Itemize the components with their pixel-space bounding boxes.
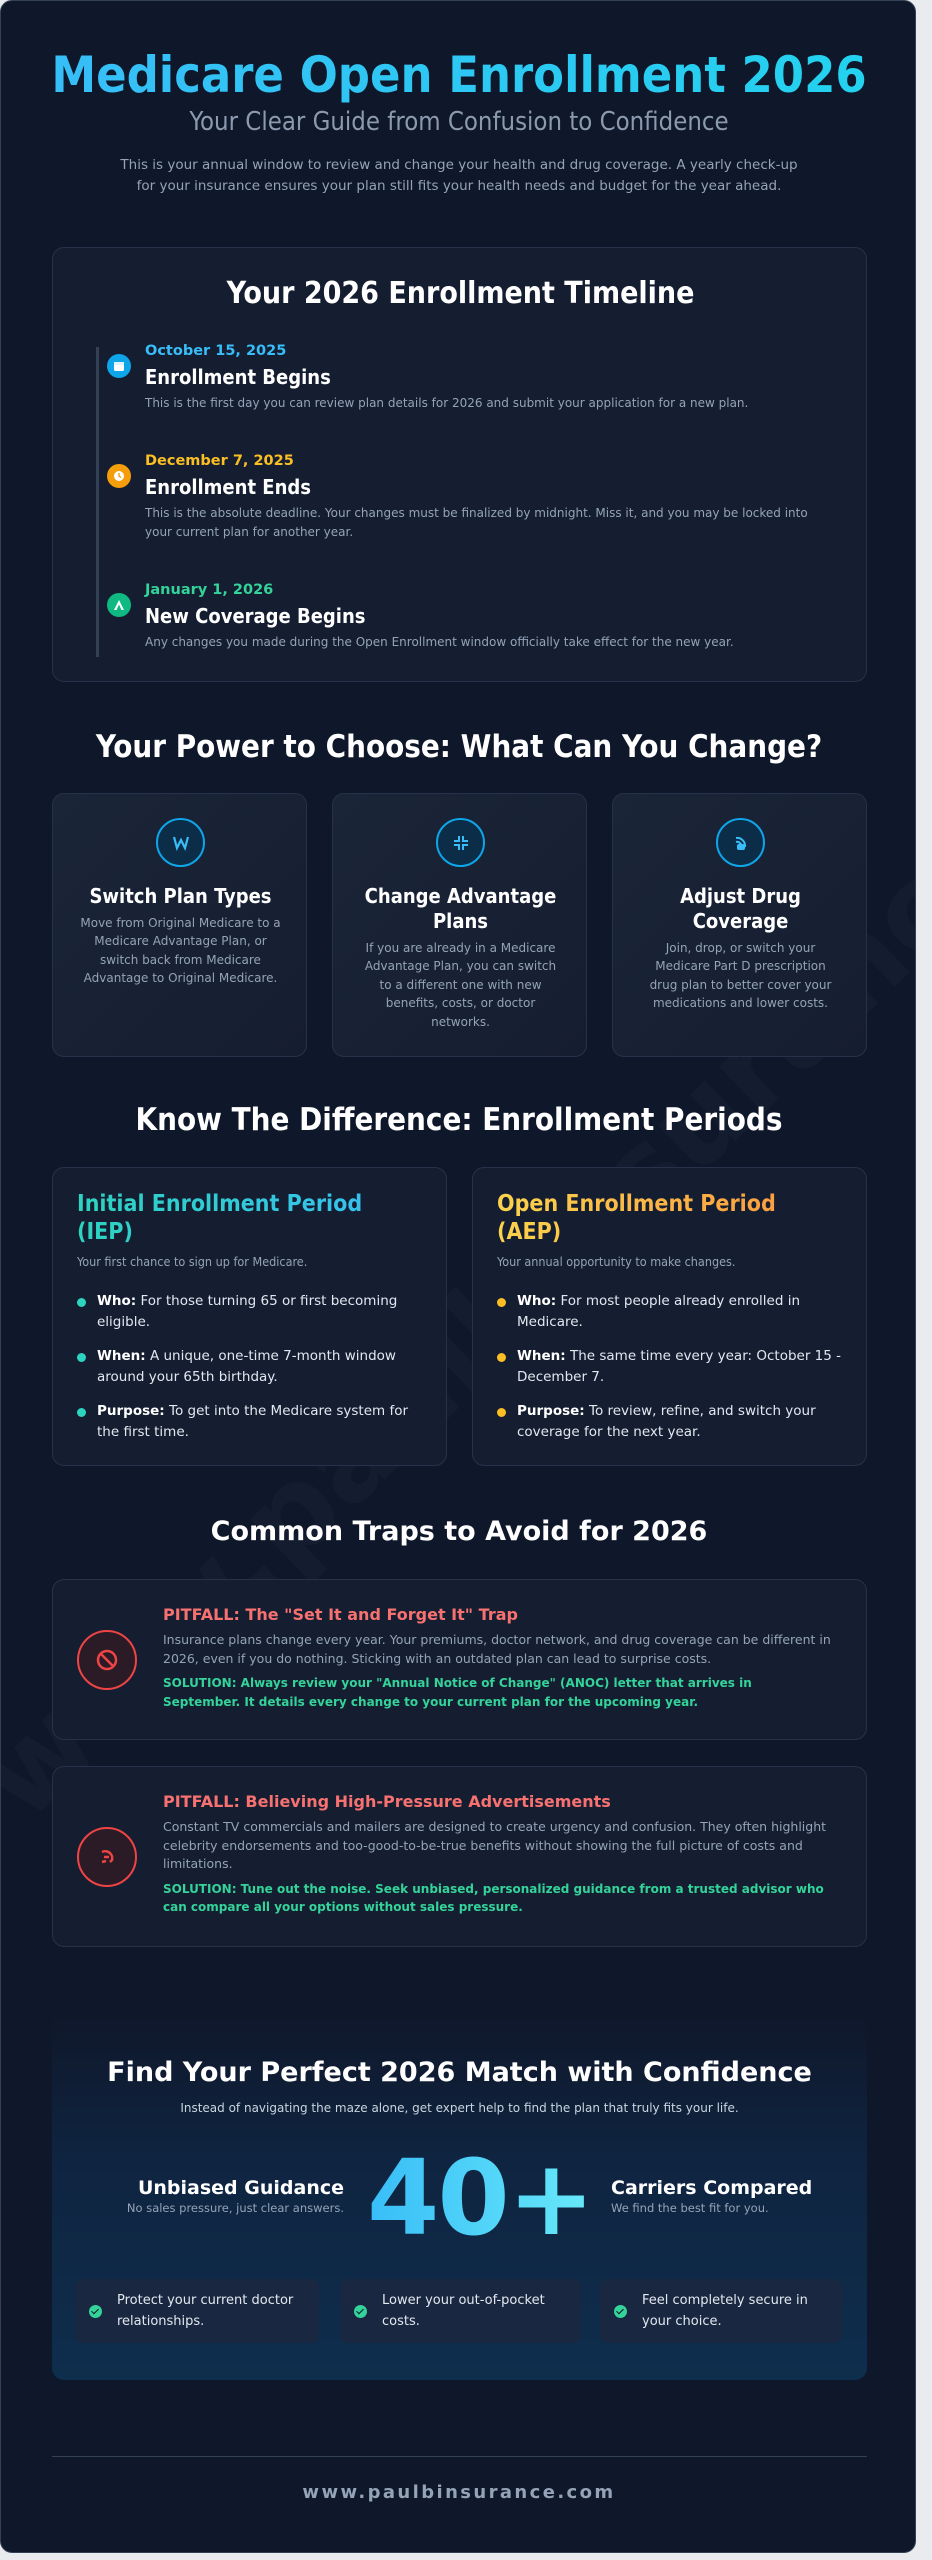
stat right: We find the best fit for you. — [611, 2201, 769, 2215]
card: switch plan types: Move from Original Medicare to a — [80, 916, 281, 930]
card: change advantage plans — [332, 793, 587, 1057]
panel: AEP — [472, 1167, 867, 1466]
AEP title: (AEP) — [497, 1219, 561, 1245]
stat left — [127, 2177, 344, 2215]
intro text: This is your annual window to review and change your health and drug coverage. A yearly check-up for your insurance ensures your plan still fits your health needs and budget for the year ahead. — [120, 157, 798, 194]
panel: trap 1: Insurance plans change every year. Your premiums, doctor network, and drug coverage can be different in — [163, 1632, 831, 1647]
icon: calendar — [107, 354, 131, 378]
IEP title: (IEP) — [77, 1219, 133, 1245]
subtitle: Your Clear Guide from Confusion to Confidence — [189, 107, 729, 137]
panel: IEP — [52, 1167, 447, 1466]
AEP bullets: Purpose: To review, refine, and switch your coverage for the next year. — [517, 1403, 816, 1440]
icon: switch — [156, 818, 205, 867]
timeline item 2: This is the absolute deadline. Your changes must be finalized by midnight. Miss it, and you may be locked into your current plan for another year. — [145, 506, 808, 539]
timeline item 3 — [107, 582, 734, 649]
timeline item 2 — [107, 453, 808, 539]
IEP title: Initial Enrollment Period — [77, 1191, 362, 1217]
card: adjust drug coverage: Join, drop, or switch your — [666, 941, 815, 955]
big number 40+: 40+ — [367, 2137, 593, 2259]
title: Medicare Open Enrollment 2026 — [51, 46, 867, 104]
card: change advantage plans: Change Advantage — [365, 884, 556, 908]
card: switch plan types: Medicare Advantage Plan, or — [94, 934, 267, 948]
timeline item 2: Enrollment Ends — [145, 475, 311, 499]
timeline item 3: Any changes you made during the Open Enrollment window officially take effect for the new year. — [145, 635, 734, 649]
CTA heading: Find Your Perfect 2026 Match with Confidence — [107, 2057, 812, 2088]
icon: clock — [107, 464, 131, 488]
AEP bullets — [497, 1293, 841, 1440]
benefit 3: Feel completely secure in your choice. — [642, 2293, 808, 2329]
benefit 2 — [340, 2279, 581, 2343]
card: adjust drug coverage: medications and lower costs. — [653, 996, 828, 1010]
benefit 3 — [600, 2279, 842, 2343]
IEP bullets: Who: For those turning 65 or first becoming eligible. — [97, 1293, 397, 1330]
panel: trap 2: celebrity endorsements and too-good-to-be-true benefits without showing the full picture of costs and — [163, 1838, 803, 1852]
timeline item 3: January 1, 2026 — [145, 582, 273, 598]
panel: trap 2: can compare all your options without sales pressure. — [163, 1900, 523, 1914]
footer url: www.paulbinsurance.com — [302, 2482, 616, 2503]
timeline heading: Your 2026 Enrollment Timeline — [227, 276, 694, 311]
card: switch plan types: Switch Plan Types — [89, 884, 272, 908]
card: switch plan types: Advantage to Original Medicare. — [84, 971, 277, 985]
stat right — [611, 2177, 812, 2215]
IEP bullets: Purpose: To get into the Medicare system for the first time. — [97, 1403, 408, 1440]
card: change advantage plans: to a different one with new — [379, 978, 542, 992]
icon: megaphone — [77, 1827, 137, 1887]
timeline item 3: New Coverage Begins — [145, 604, 366, 628]
card: adjust drug coverage: Coverage — [693, 909, 788, 933]
card: change advantage plans: If you are already in a Medicare — [366, 941, 555, 955]
stat left: Unbiased Guidance — [138, 2177, 344, 2199]
AEP title — [497, 1190, 847, 1246]
card: adjust drug coverage: Adjust Drug — [680, 884, 801, 908]
card: change advantage plans: Plans — [433, 909, 488, 933]
timeline item 1: This is the first day you can review plan details for 2026 and submit your application for a new plan. — [145, 396, 748, 410]
panel: timeline — [52, 247, 867, 682]
heading: power to choose: Your Power to Choose: What Can You Change? — [96, 729, 822, 765]
timeline item 2: December 7, 2025 — [145, 453, 294, 469]
panel: trap 2: PITFALL: Believing High-Pressure Advertisements — [163, 1792, 611, 1811]
card: change advantage plans: networks. — [431, 1015, 490, 1029]
stat right: Carriers Compared — [611, 2177, 812, 2199]
heading: common traps: Common Traps to Avoid for 2026 — [211, 1516, 707, 1547]
card: adjust drug coverage: drug plan to better cover your — [650, 978, 831, 992]
AEP bullets: Who: For most people already enrolled in Medicare. — [517, 1293, 800, 1330]
AEP bullets: When: The same time every year: October 15 - December 7. — [517, 1348, 841, 1385]
icon: arrows — [436, 818, 485, 867]
IEP title — [77, 1190, 427, 1246]
panel: trap 1: PITFALL: The "Set It and Forget It" Trap — [163, 1605, 518, 1624]
panel: AEP: Your annual opportunity to make changes. — [497, 1254, 735, 1269]
AEP title: Open Enrollment Period — [497, 1191, 776, 1217]
panel: trap 1: SOLUTION: Always review your "Annual Notice of Change" (ANOC) letter that arrives in — [163, 1676, 752, 1690]
benefit 2: Lower your out-of-pocket costs. — [382, 2293, 545, 2329]
card: change advantage plans: benefits, costs, or doctor — [386, 996, 535, 1010]
panel: IEP: Your first chance to sign up for Medicare. — [77, 1254, 307, 1269]
card: adjust drug coverage: Medicare Part D prescription — [655, 959, 826, 973]
icon: start — [107, 593, 131, 617]
panel: trap 2: Constant TV commercials and mailers are designed to create urgency and confusion. They often highlight — [163, 1819, 826, 1834]
panel: trap 2: SOLUTION: Tune out the noise. Seek unbiased, personalized guidance from a trusted advisor who — [163, 1882, 824, 1896]
card: switch plan types — [52, 793, 307, 1057]
panel: CTA — [52, 2011, 867, 2380]
timeline line — [96, 347, 99, 657]
panel: trap 1: September. It details every change to your current plan for the upcoming year. — [163, 1694, 698, 1708]
heading: enrollment periods: Know The Difference: Enrollment Periods — [136, 1102, 782, 1138]
stat left: No sales pressure, just clear answers. — [127, 2201, 344, 2215]
icon: ban — [77, 1630, 137, 1690]
card: adjust drug coverage — [612, 793, 867, 1057]
panel: trap 1 — [52, 1579, 867, 1740]
card: change advantage plans: Advantage Plan, you can switch — [365, 959, 556, 973]
panel: trap 2: limitations. — [163, 1856, 233, 1871]
timeline item 1 — [107, 343, 748, 410]
card: switch plan types: switch back from Medicare — [100, 953, 261, 967]
panel: trap 2 — [52, 1766, 867, 1947]
IEP bullets — [77, 1293, 408, 1440]
IEP bullets: When: A unique, one-time 7-month window around your 65th birthday. — [97, 1348, 396, 1385]
benefit 1: Protect your current doctor relationships. — [117, 2293, 293, 2329]
icon: pill — [716, 818, 765, 867]
benefit 1 — [75, 2279, 319, 2343]
CTA subtitle: Instead of navigating the maze alone, get expert help to find the plan that truly fits your life. — [180, 2101, 739, 2115]
timeline item 1: October 15, 2025 — [145, 343, 286, 359]
timeline item 1: Enrollment Begins — [145, 365, 331, 389]
panel: trap 1: 2026, even if you do nothing. Sticking with an outdated plan can lead to surprise costs. — [163, 1650, 711, 1666]
